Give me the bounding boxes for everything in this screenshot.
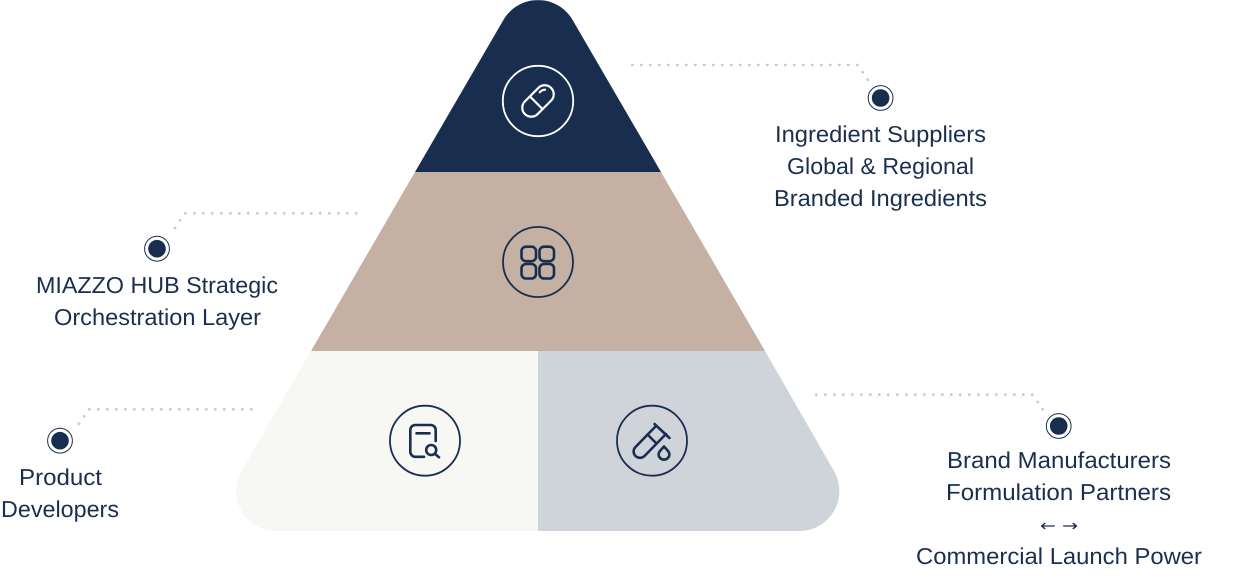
marker: bottom left bbox=[48, 428, 72, 453]
icon: four squares bbox=[503, 227, 573, 297]
pyramid bbox=[236, 0, 839, 531]
label: miazzo hub: MIAZZO HUB Strategic bbox=[36, 272, 278, 298]
connector: middle left bbox=[174, 213, 357, 229]
label: brand manufacturers: ← bbox=[1040, 516, 1056, 535]
label: brand manufacturers: Formulation Partners bbox=[946, 479, 1171, 505]
tier: top navy bbox=[415, 0, 661, 172]
connector: top right bbox=[632, 65, 869, 81]
label: product developers bbox=[1, 464, 119, 522]
label: miazzo hub bbox=[36, 272, 278, 330]
label: brand manufacturers: → bbox=[1062, 516, 1078, 535]
label: product developers: Developers bbox=[1, 496, 119, 522]
label: ingredient suppliers: Ingredient Suppliers bbox=[775, 121, 986, 147]
label: miazzo hub: Orchestration Layer bbox=[54, 304, 261, 330]
connector: bottom right bbox=[816, 395, 1044, 411]
marker: middle left bbox=[145, 236, 169, 261]
tier: bottom left bbox=[236, 351, 538, 531]
icon: document search bbox=[390, 406, 460, 476]
marker: bottom right bbox=[1046, 414, 1071, 438]
label: ingredient suppliers bbox=[774, 121, 987, 211]
tier: middle tan bbox=[311, 172, 765, 351]
marker: top right bbox=[868, 86, 893, 110]
connector: bottom left bbox=[78, 409, 252, 425]
icon: capsule bbox=[503, 66, 573, 136]
label: brand manufacturers bbox=[916, 447, 1202, 569]
label: brand manufacturers: Brand Manufacturers bbox=[947, 447, 1171, 473]
label: ingredient suppliers: Branded Ingredients bbox=[774, 185, 987, 211]
label: brand manufacturers: Commercial Launch Power bbox=[916, 543, 1202, 569]
tier: bottom right bbox=[538, 351, 839, 531]
label: product developers: Product bbox=[19, 464, 103, 490]
label: ingredient suppliers: Global & Regional bbox=[787, 153, 974, 179]
icon: test tube and drop bbox=[617, 406, 687, 476]
